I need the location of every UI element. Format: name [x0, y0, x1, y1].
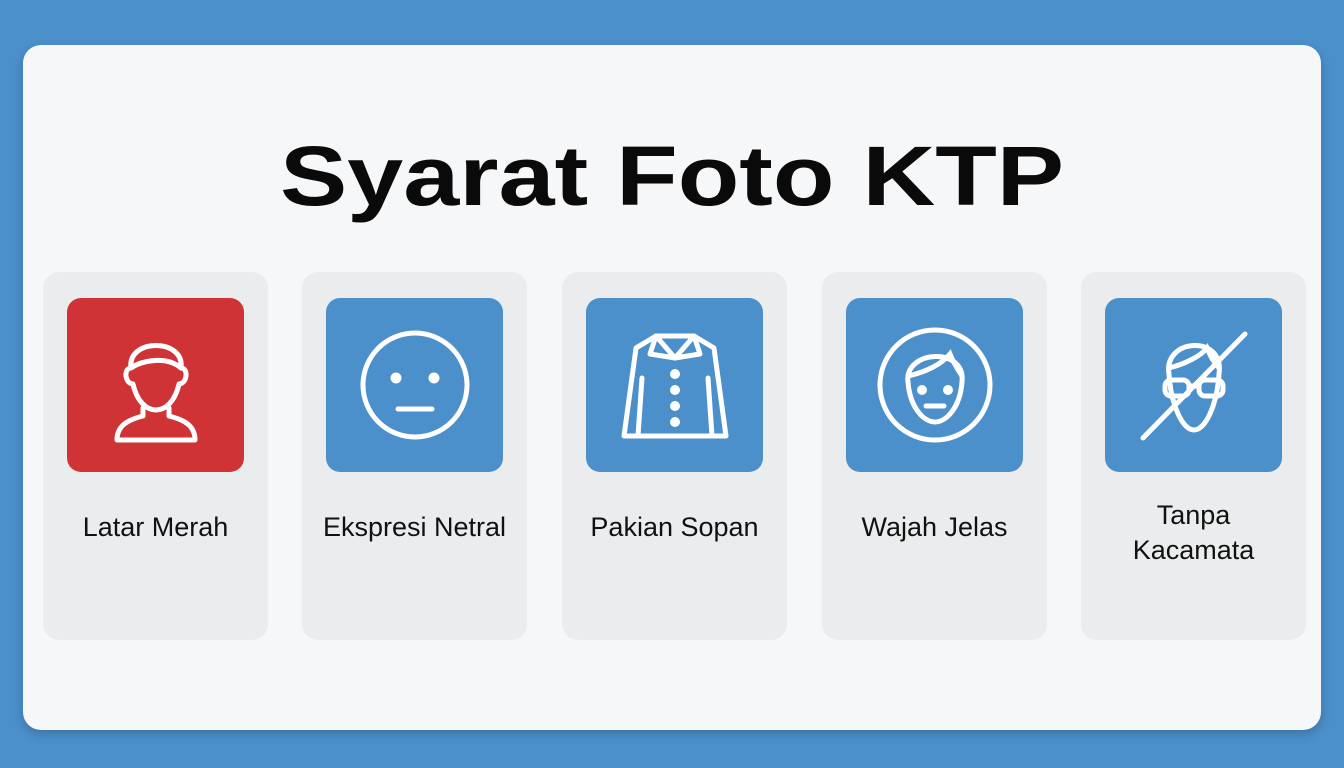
label: Tanpa	[1157, 500, 1230, 530]
label: Wajah Jelas	[861, 512, 1008, 542]
icon: clear face	[846, 298, 1023, 472]
card: tanpa kacamata	[1081, 272, 1306, 640]
card: pakaian sopan	[562, 272, 787, 640]
card: latar merah	[43, 272, 268, 640]
card: wajah jelas	[822, 272, 1047, 640]
label: Pakian Sopan	[590, 512, 759, 542]
icon: no glasses	[1105, 298, 1282, 472]
label: Ekspresi Netral	[323, 512, 506, 542]
icon: shirt	[586, 298, 763, 472]
card: ekspresi netral	[302, 272, 527, 640]
icon: neutral face	[326, 298, 503, 472]
icon: person red background	[67, 298, 244, 472]
title: Syarat Foto KTP	[280, 129, 1064, 223]
label	[1133, 500, 1254, 565]
label: Latar Merah	[83, 512, 228, 542]
label: Kacamata	[1133, 535, 1254, 565]
